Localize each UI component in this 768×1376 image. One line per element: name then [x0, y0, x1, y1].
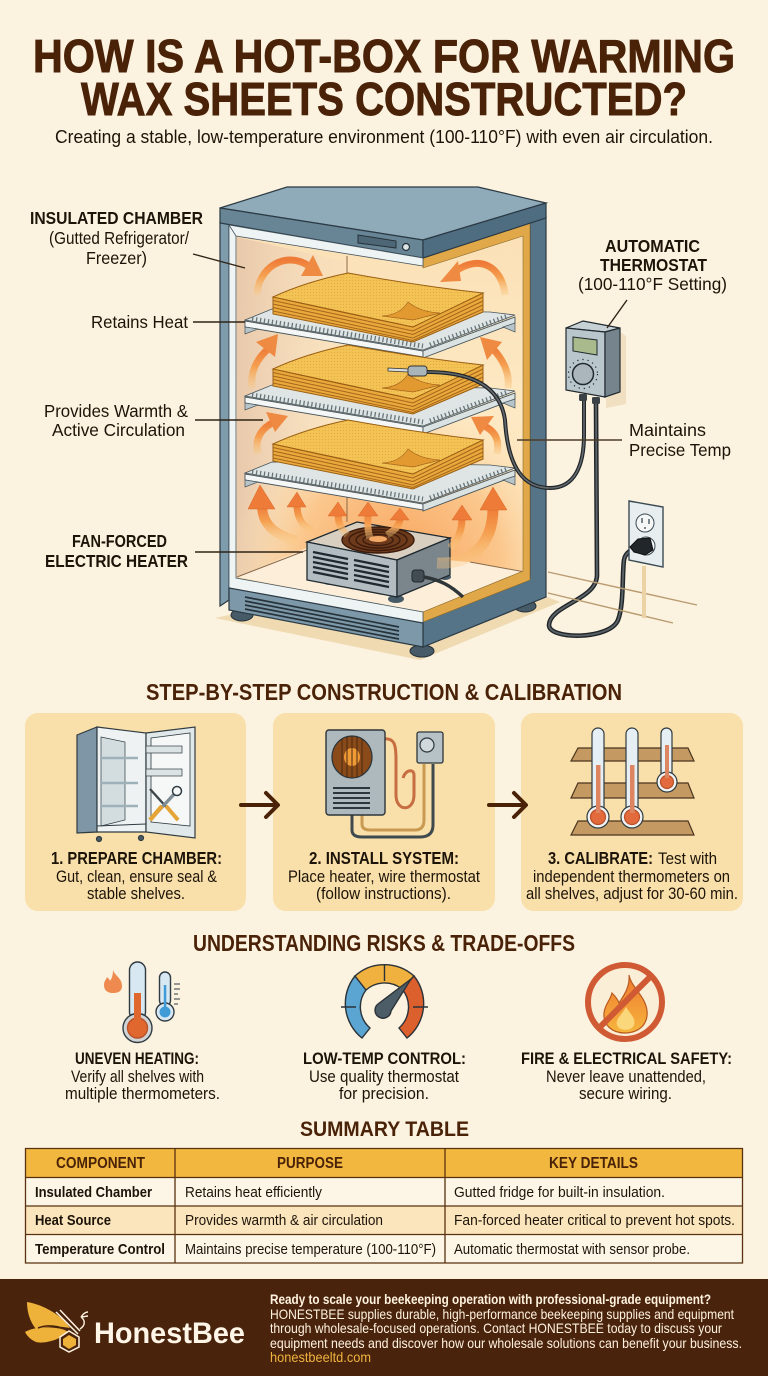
icon: thermometers and flame	[104, 962, 180, 1042]
floor shadow	[215, 590, 560, 660]
risk: fire and electrical safety	[521, 965, 732, 1103]
footer text	[270, 1291, 742, 1365]
label: insulated chamber	[30, 208, 203, 268]
label: maintains precise temp: Precise Temp	[629, 440, 731, 460]
step 1 text: stable shelves.	[87, 885, 185, 903]
wax stack 1	[273, 273, 483, 342]
text: UNEVEN HEATING:	[75, 1049, 199, 1068]
label: provides warmth: Provides Warmth &	[44, 401, 188, 421]
row: temperature control: Temperature Control	[35, 1241, 165, 1258]
row: heat source	[35, 1212, 735, 1229]
step 3 text	[526, 848, 738, 903]
footer	[0, 1279, 768, 1376]
footer text: honestbeeltd.com	[270, 1349, 371, 1365]
label: provides warmth	[44, 401, 188, 440]
icon: heater and thermostat wiring	[326, 730, 443, 837]
wax stack 3	[273, 420, 483, 489]
label: automatic thermostat: (100-110°F Setting)	[578, 274, 727, 294]
text	[521, 1049, 732, 1103]
cabinet front frame	[220, 222, 229, 606]
step 2 text: 2. INSTALL SYSTEM:	[309, 848, 459, 868]
row: insulated chamber	[35, 1184, 665, 1201]
illustration: hot-box cabinet	[215, 187, 697, 660]
icon: no fire	[588, 965, 662, 1039]
risk: uneven heating	[65, 962, 220, 1103]
heat arrows: upper chamber	[252, 255, 508, 454]
label: maintains precise temp: Maintains	[629, 420, 706, 440]
icon: gutted refrigerator	[77, 727, 195, 842]
panel: step 2 install system	[273, 713, 495, 911]
feet	[231, 600, 536, 657]
text: Verify all shelves with	[71, 1068, 204, 1086]
row: heat source: Fan-forced heater critical to prevent hot spots.	[454, 1212, 735, 1229]
fan-forced heater	[307, 522, 463, 603]
label: maintains precise temp	[629, 420, 731, 460]
arrow: step 1 to 2	[241, 793, 278, 817]
power cord	[549, 404, 642, 636]
label: automatic thermostat	[578, 236, 727, 294]
row: temperature control	[35, 1241, 690, 1258]
step 1 text	[51, 848, 222, 903]
label: automatic thermostat: AUTOMATIC	[605, 236, 700, 256]
shelf 2	[245, 385, 515, 434]
table header: COMPONENT	[56, 1155, 145, 1172]
automatic thermostat unit	[566, 321, 626, 408]
row: heat source: Heat Source	[35, 1212, 111, 1229]
title	[33, 30, 735, 125]
leader lines	[193, 254, 627, 552]
heading: summary table: SUMMARY TABLE	[300, 1117, 469, 1141]
step 2 text: (follow instructions).	[316, 885, 451, 903]
base with vents	[229, 588, 423, 647]
label: fan-forced heater	[45, 531, 188, 571]
label: insulated chamber: Freezer)	[86, 248, 147, 268]
brand name: HonestBee	[94, 1317, 245, 1350]
table header	[56, 1155, 638, 1172]
label: insulated chamber: (Gutted Refrigerator/	[49, 228, 189, 248]
step 1 text: Gut, clean, ensure seal &	[56, 868, 217, 886]
interior chamber	[230, 228, 526, 613]
heading: risks: UNDERSTANDING RISKS & TRADE-OFFS	[193, 930, 575, 956]
text	[303, 1049, 466, 1103]
cabinet right side and insulation	[423, 216, 546, 647]
step 2 text	[288, 848, 480, 903]
icon: gauge	[341, 964, 428, 1038]
row: insulated chamber: Insulated Chamber	[35, 1184, 152, 1201]
risk: low-temp control	[303, 964, 466, 1103]
icon: honeybee logo	[25, 1302, 88, 1352]
arrow: step 2 to 3	[489, 793, 526, 817]
subtitle: Creating a stable, low-temperature environment (100-110°F) with even air circulation.	[55, 126, 713, 147]
heat arrows: lower chamber	[248, 485, 507, 563]
table header: KEY DETAILS	[549, 1155, 638, 1172]
step 3 text: Test with	[658, 850, 717, 868]
lid	[220, 187, 546, 266]
text	[65, 1049, 220, 1103]
row: insulated chamber: Retains heat efficiently	[185, 1184, 322, 1201]
row: temperature control: Automatic thermostat with sensor probe.	[454, 1241, 690, 1258]
table header: PURPOSE	[277, 1155, 343, 1172]
label: retains heat: Retains Heat	[91, 312, 188, 332]
text: multiple thermometers.	[65, 1085, 220, 1103]
thermostat probe and cord	[388, 366, 584, 488]
row: heat source: Provides warmth & air circulation	[185, 1212, 383, 1229]
text: Never leave unattended,	[546, 1068, 706, 1086]
step 2 text: Place heater, wire thermostat	[288, 868, 480, 886]
panel: step 1 prepare chamber	[25, 713, 246, 911]
row: temperature control: Maintains precise temperature (100-110°F)	[185, 1241, 436, 1258]
icon: thermometers on shelves	[571, 728, 694, 835]
text: FIRE & ELECTRICAL SAFETY:	[521, 1049, 732, 1068]
step 1 text: 1. PREPARE CHAMBER:	[51, 848, 222, 868]
label: automatic thermostat: THERMOSTAT	[600, 255, 707, 275]
label: fan-forced heater: FAN-FORCED	[72, 531, 167, 551]
title: WAX SHEETS CONSTRUCTED?	[81, 73, 687, 125]
label: fan-forced heater: ELECTRIC HEATER	[45, 551, 188, 571]
step 3 text: 3. CALIBRATE:	[548, 848, 653, 868]
text: Use quality thermostat	[309, 1068, 459, 1086]
row: insulated chamber: Gutted fridge for built-in insulation.	[454, 1184, 665, 1201]
label: provides warmth: Active Circulation	[52, 420, 185, 440]
text: for precision.	[339, 1085, 429, 1103]
summary table	[26, 1148, 742, 1263]
shelf 3	[245, 462, 515, 511]
heading: step-by-step: STEP-BY-STEP CONSTRUCTION & CALIBRATION	[146, 679, 622, 705]
wall outlet	[629, 501, 663, 618]
baseboard lines	[548, 572, 697, 623]
step 3 text: independent thermometers on	[533, 868, 730, 886]
label: insulated chamber: INSULATED CHAMBER	[30, 208, 203, 228]
text: LOW-TEMP CONTROL:	[303, 1049, 466, 1068]
text: secure wiring.	[579, 1085, 672, 1103]
panel: step 3 calibrate	[521, 713, 743, 911]
step 3 text: all shelves, adjust for 30-60 min.	[526, 885, 738, 903]
shelf 1	[245, 309, 515, 358]
wax stack 2	[273, 345, 483, 414]
